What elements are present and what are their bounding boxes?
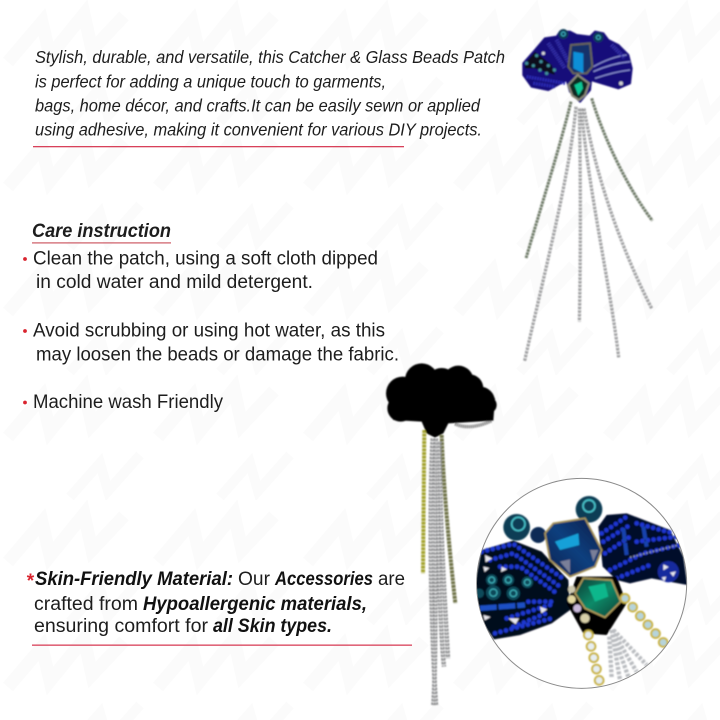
skin-friendly note: Skin-Friendly Material: <box>35 569 233 590</box>
rhinestone strands <box>588 635 601 687</box>
skin-friendly note <box>26 569 405 637</box>
pearls <box>503 514 530 541</box>
intro paragraph: bags, home décor, and crafts.It can be easily sewn or applied <box>35 96 481 116</box>
product photo: back of patch with chains <box>386 363 497 705</box>
chains <box>525 98 652 361</box>
care item: machine wash: Machine wash Friendly <box>33 392 223 413</box>
care item: avoid scrubbing: Avoid scrubbing or using hot water, as this <box>33 320 385 342</box>
chains <box>423 430 455 705</box>
skin-friendly note: all Skin types. <box>213 616 332 637</box>
care item: avoid scrubbing: may loosen the beads or damage the fabric. <box>36 344 399 366</box>
skin-friendly note: Our <box>238 569 271 590</box>
intro paragraph: Stylish, durable, and versatile, this Catcher & Glass Beads Patch <box>35 47 505 67</box>
detail close-up circle <box>475 478 687 688</box>
care item: clean: Clean the patch, using a soft cloth dipped <box>33 248 378 270</box>
heading: care instruction: Care instruction <box>32 221 171 242</box>
skin-friendly note: Accessories <box>274 569 373 590</box>
care item: clean <box>23 248 378 293</box>
silver chains <box>609 630 647 680</box>
blue gem <box>568 43 592 73</box>
left wing <box>475 541 570 639</box>
care list <box>23 248 399 413</box>
skin-friendly note: ensuring comfort for <box>34 616 209 637</box>
intro paragraph: using adhesive, making it convenient for various DIY projects. <box>35 120 482 140</box>
intro paragraph <box>35 47 505 140</box>
care item: clean: in cold water and mild detergent. <box>36 272 313 293</box>
blue square gem <box>545 518 602 577</box>
pearls <box>558 29 568 39</box>
black base <box>567 577 627 635</box>
skin-friendly note: Hypoallergenic materials, <box>143 594 367 615</box>
intro paragraph: is perfect for adding a unique touch to garments, <box>35 72 386 92</box>
green gem <box>568 75 589 100</box>
fan body <box>523 32 632 102</box>
skin-friendly note: crafted from <box>34 594 138 615</box>
skin-friendly note: are <box>378 569 405 590</box>
skin-friendly note: * <box>26 571 35 592</box>
right wing <box>598 513 687 585</box>
care item: avoid scrubbing <box>23 320 399 366</box>
product photo: front of patch with chains <box>523 29 652 361</box>
black backing <box>386 363 497 438</box>
green gem <box>575 578 621 617</box>
